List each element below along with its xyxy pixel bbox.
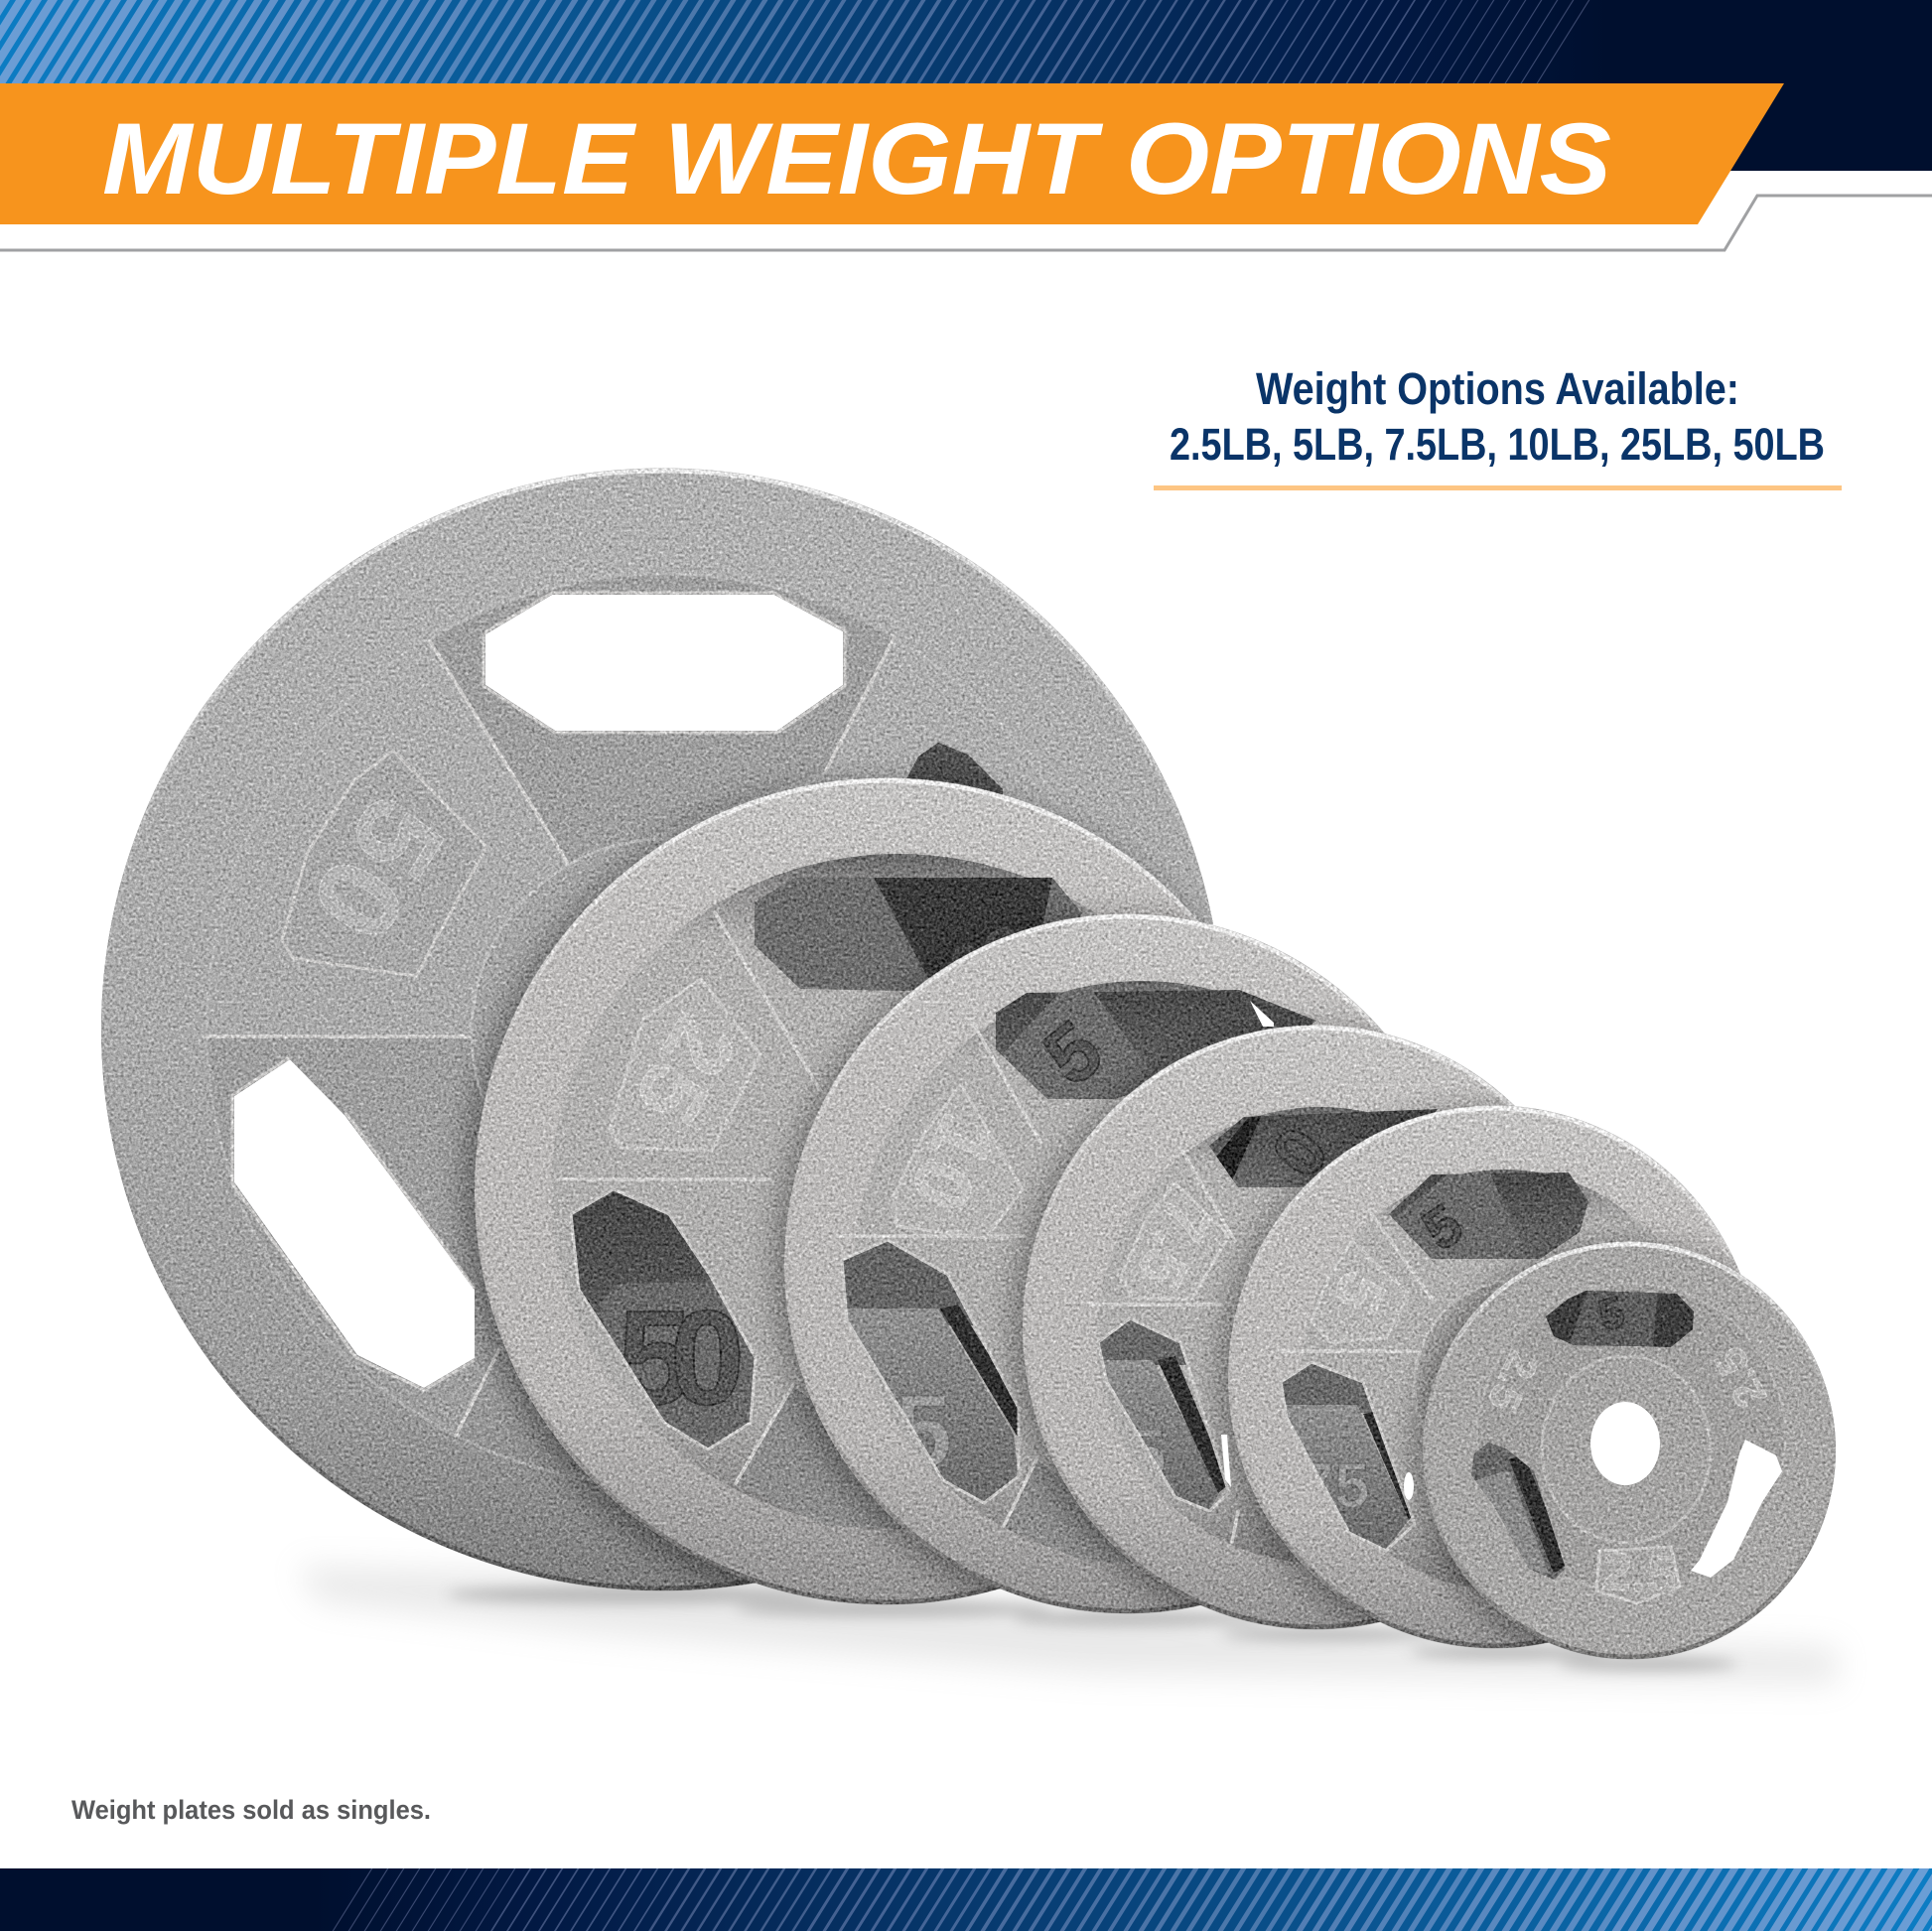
lower hole number behind: 75 bbox=[1299, 1449, 1370, 1521]
plate 25 top grip hole bbox=[755, 878, 1082, 991]
lower hole dark slit bbox=[940, 1305, 1022, 1439]
floor shadow bbox=[298, 1567, 1837, 1683]
shadow of plate 7.5 bbox=[1011, 1027, 1606, 1638]
plate 2.5 number left: 2.5 bbox=[1478, 1343, 1548, 1419]
plate 50 rim edge bbox=[207, 574, 1118, 1485]
plate 7.5 rim bbox=[1023, 1026, 1608, 1629]
plate: 7.5 lb bbox=[1023, 1026, 1608, 1629]
plate 10 rim highlight bbox=[786, 916, 1467, 1611]
lower hole upper shading bbox=[1276, 1358, 1420, 1413]
plate 2.5 rim highlight bbox=[1425, 1244, 1834, 1657]
weight options callout bbox=[1154, 363, 1842, 490]
footnote: Weight plates sold as singles. bbox=[71, 1795, 431, 1825]
lower hole dark slit bbox=[1158, 1356, 1229, 1493]
plate 5 rim highlight bbox=[1230, 1108, 1758, 1646]
plate 2.5 hub bbox=[1542, 1356, 1711, 1543]
contact shadow plate 7.5 bbox=[1221, 1627, 1440, 1641]
callout heading: Weight Options Available: bbox=[1256, 363, 1739, 414]
plate: 2.5 lb bbox=[1423, 1242, 1836, 1659]
plate 50 number: 50 bbox=[281, 775, 470, 968]
plate 10 label badge bbox=[894, 1084, 1023, 1238]
plate 2.5 lower grip hole bbox=[1467, 1440, 1572, 1584]
plate 10 lower hole edge bbox=[842, 1240, 1019, 1503]
plate 5 number: 5 bbox=[1319, 1261, 1401, 1324]
lower hole upper shading bbox=[839, 1236, 1028, 1325]
plate 7.5 number: 7.5 bbox=[1124, 1189, 1226, 1300]
top hole dark badge behind bbox=[874, 878, 1052, 978]
plate 25 rim highlight bbox=[477, 780, 1297, 1602]
lower hole dark slit bbox=[1363, 1411, 1418, 1520]
header: gray outline stroke bbox=[0, 196, 1932, 250]
shadow of plate 2.5 bbox=[1412, 1242, 1833, 1667]
shadow of plate 25 bbox=[462, 780, 1296, 1614]
shadow of plate 5 bbox=[1217, 1107, 1757, 1657]
plate 7.5 rim highlight bbox=[1025, 1028, 1606, 1627]
plate 50 body bbox=[101, 469, 1223, 1590]
plate 10 recessed face bbox=[854, 981, 1430, 1563]
plate 50 label badge bbox=[282, 751, 486, 976]
top hole shading bbox=[755, 878, 1082, 991]
lower hole lit plate bbox=[1101, 1360, 1221, 1511]
top hole badge behind bbox=[1569, 1289, 1658, 1346]
lower hole lit plate bbox=[842, 1309, 1019, 1503]
plate 7.5 recessed face bbox=[1097, 1107, 1544, 1564]
top hole number behind: 5 bbox=[1028, 1004, 1119, 1103]
plate 25 lower hole edge bbox=[571, 1189, 756, 1449]
sliver behind plate 10 bbox=[1250, 1001, 1274, 1027]
plate 50 grip hole bevels bbox=[232, 593, 845, 1390]
plate 5 label badge bbox=[1311, 1241, 1409, 1342]
plate 50 third grip hole bbox=[898, 743, 1003, 824]
weight plates photo bbox=[101, 469, 1836, 1667]
lower hole number behind: 5 bbox=[1127, 1416, 1167, 1495]
plate 25 recessed face bbox=[551, 854, 1246, 1529]
lower hole 50 number: 50 bbox=[618, 1283, 745, 1433]
top hole shading bbox=[993, 983, 1320, 1102]
plate 25 label badge bbox=[610, 979, 760, 1151]
plate 50 spoke ridges bbox=[205, 636, 895, 1436]
plate 2.5 rim bbox=[1423, 1242, 1836, 1659]
plate 5 lower hole edge bbox=[1281, 1362, 1415, 1551]
lower hole number behind: 5 bbox=[895, 1374, 952, 1490]
plate 2.5 label badge bottom bbox=[1596, 1547, 1680, 1603]
plate 7.5 label badge bbox=[1121, 1183, 1229, 1299]
plate 25 lower grip hole bbox=[566, 1186, 764, 1454]
top hole number behind: 5 bbox=[1593, 1288, 1629, 1340]
plate 25 spoke ridges bbox=[558, 912, 820, 1483]
contact shadow plate 50 bbox=[447, 1586, 824, 1603]
footer striped band bbox=[0, 1868, 1932, 1931]
contact shadow plate 10 bbox=[1013, 1610, 1271, 1626]
contact shadow plate 25 bbox=[735, 1600, 1052, 1616]
plate 25 lower shaded sector bbox=[736, 1385, 902, 1529]
callout weights list: 2.5LB, 5LB, 7.5LB, 10LB, 25LB, 50LB bbox=[1170, 419, 1825, 470]
lower hole shading bbox=[1467, 1440, 1572, 1584]
plate 5 spoke ridges bbox=[1278, 1210, 1432, 1351]
plate 10 rim bbox=[784, 914, 1469, 1613]
plate 2.5 top grip hole bbox=[1539, 1287, 1698, 1351]
top hole badge behind bbox=[999, 986, 1149, 1099]
plate 2.5 number right: 2.5 bbox=[1705, 1339, 1776, 1416]
lower hole lit plate bbox=[1473, 1469, 1549, 1574]
shadow of plate 10 bbox=[772, 915, 1467, 1622]
plate 7.5 top grip hole bbox=[1201, 1102, 1449, 1191]
plate 5 rim bbox=[1228, 1106, 1760, 1648]
plate 25 number: 25 bbox=[614, 999, 756, 1144]
lower hole shading bbox=[566, 1186, 764, 1454]
plate 7.5 lower hole edge bbox=[1098, 1318, 1229, 1511]
top hole number behind: 5 bbox=[1411, 1192, 1474, 1263]
plate 10 top grip hole bbox=[993, 983, 1320, 1103]
plate 10 lower shaded sector bbox=[1004, 1459, 1131, 1564]
plate: 25 lb bbox=[475, 778, 1199, 1604]
lower hole lit plate bbox=[1284, 1405, 1409, 1549]
top hole number behind: 0 bbox=[1257, 1114, 1344, 1191]
top hole shading bbox=[1201, 1102, 1449, 1191]
contact shadow plate 2.5 bbox=[1559, 1657, 1737, 1671]
plate 25 rim bbox=[475, 778, 1299, 1604]
plate 50 outer highlight bbox=[103, 471, 1221, 1588]
plate 10 spoke ridges bbox=[837, 1020, 1040, 1526]
plate 50 hub bbox=[472, 839, 859, 1226]
lower hole badge behind bbox=[599, 1282, 764, 1430]
plate 2.5 right grip hole bbox=[1691, 1440, 1782, 1578]
plate 50 darker recessed sectors bbox=[205, 575, 895, 1436]
top hole dark slit bbox=[1216, 1112, 1263, 1187]
header: striped blue band bbox=[0, 0, 1932, 83]
lower hole upper shading bbox=[1092, 1310, 1236, 1365]
plate 2.5 inner face edge bbox=[1477, 1284, 1785, 1591]
top hole badge behind bbox=[1390, 1172, 1529, 1259]
title: MULTIPLE WEIGHT OPTIONS bbox=[102, 102, 1611, 215]
plate 5 top grip hole bbox=[1385, 1170, 1593, 1264]
plate: 10 lb bbox=[784, 914, 1469, 1613]
lower hole dark slit bbox=[1509, 1454, 1569, 1574]
header: navy block bbox=[1628, 0, 1932, 171]
plate 5 recessed face bbox=[1301, 1170, 1708, 1590]
plate: 50 lb bbox=[101, 469, 1223, 1590]
plate 10 lower grip hole bbox=[839, 1236, 1028, 1503]
plate 10 number: 10 bbox=[891, 1101, 1013, 1227]
contact shadows under plates bbox=[447, 1586, 1737, 1671]
plate 7.5 lower grip hole bbox=[1092, 1310, 1236, 1511]
plate 2.5 centre hole bbox=[1590, 1402, 1660, 1485]
plate 5 lower grip hole bbox=[1276, 1358, 1420, 1549]
top hole shading bbox=[1385, 1170, 1593, 1264]
slit behind plate 5 bbox=[1404, 1472, 1414, 1500]
plate 7.5 spoke ridges bbox=[1090, 1148, 1238, 1542]
plate 2.5 number bottom: 2.5 bbox=[1600, 1541, 1679, 1606]
top hole shading bbox=[1539, 1287, 1698, 1351]
top hole number behind: 50 bbox=[936, 908, 1039, 1012]
contact shadow plate 5 bbox=[1410, 1645, 1608, 1659]
see-through gaps in plates bbox=[1221, 1001, 1782, 1578]
callout underline bbox=[1154, 485, 1842, 490]
plate 5 hub bbox=[1415, 1281, 1613, 1489]
header: orange title banner bbox=[0, 83, 1784, 224]
plate: 5 lb bbox=[1228, 1106, 1760, 1648]
slit behind plate 7.5 bbox=[1221, 1435, 1231, 1487]
